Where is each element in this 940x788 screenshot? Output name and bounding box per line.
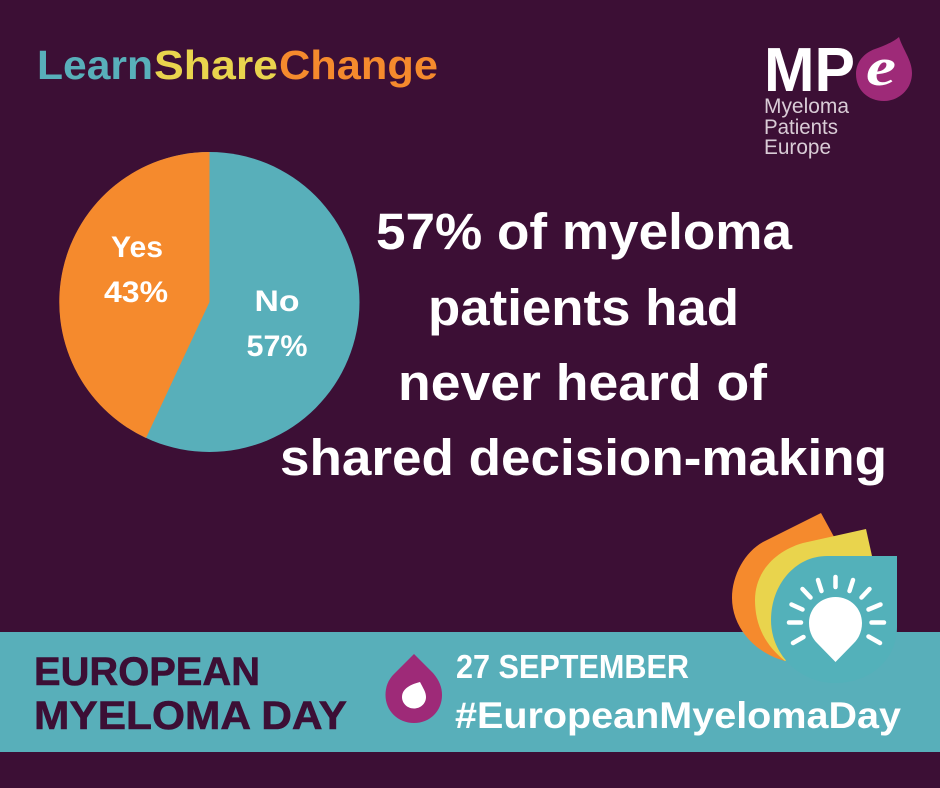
logo: Myeloma Patients Europe <box>764 36 912 159</box>
event title: MYELOMA DAY <box>34 694 347 738</box>
event title <box>34 650 347 738</box>
headline statement <box>280 203 887 486</box>
event date and hashtag: 27 SEPTEMBER <box>456 648 689 685</box>
pie chart: heard of shared decision-making <box>59 152 360 452</box>
icon: magenta drop <box>386 654 442 723</box>
tagline: LearnShareChange: Learn <box>37 42 153 88</box>
tagline: LearnShareChange: Share <box>154 42 278 88</box>
logo: Myeloma Patients Europe: MP <box>764 36 855 105</box>
event date and hashtag <box>455 648 901 736</box>
tagline: LearnShareChange <box>37 42 438 88</box>
event title: EUROPEAN <box>34 650 260 694</box>
pie chart: heard of shared decision-making: 43% <box>104 276 168 309</box>
headline statement: shared decision-making <box>280 429 887 486</box>
tagline: LearnShareChange: Change <box>279 42 438 88</box>
headline statement: never heard of <box>398 354 768 411</box>
icon: layered petals with sun <box>732 513 897 683</box>
logo: Myeloma Patients Europe: Europe <box>764 136 831 159</box>
event date and hashtag: #EuropeanMyelomaDay <box>455 695 901 736</box>
logo: Myeloma Patients Europe: Myeloma <box>764 95 849 118</box>
pie chart: heard of shared decision-making: No <box>254 285 300 318</box>
pie chart: heard of shared decision-making: 57% <box>246 330 308 363</box>
headline statement: 57% of myeloma <box>376 203 793 260</box>
logo: Myeloma Patients Europe: Patients <box>764 116 838 139</box>
footer band <box>0 632 940 752</box>
pie chart: heard of shared decision-making: Yes <box>111 231 163 264</box>
headline statement: patients had <box>428 279 739 336</box>
logo: Myeloma Patients Europe: e <box>866 37 896 97</box>
